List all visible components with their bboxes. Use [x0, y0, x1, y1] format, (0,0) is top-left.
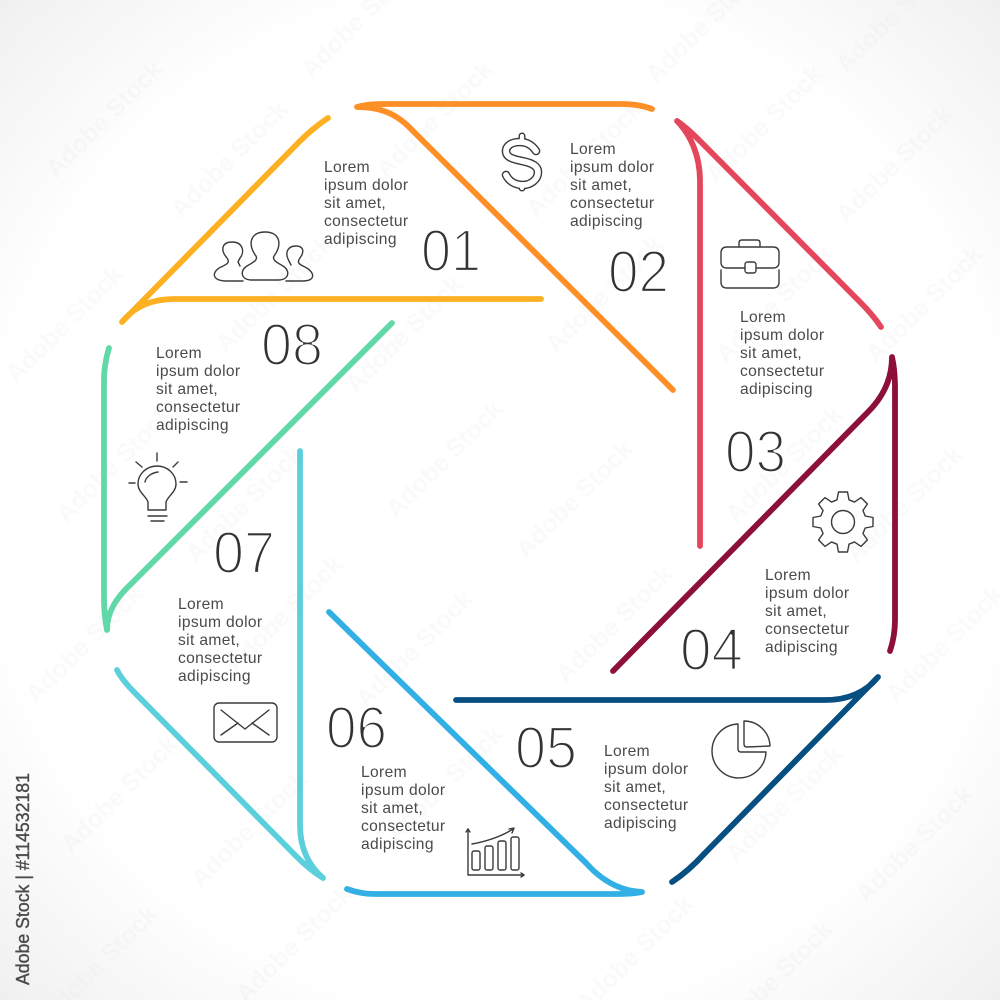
- watermark pattern: Adobe Stock: [40, 55, 168, 183]
- text block 08: consectetur: [156, 399, 240, 416]
- text block 02: Lorem: [570, 141, 616, 158]
- text block 01: sit amet,: [324, 195, 386, 212]
- text block 03: Lorem: [740, 309, 786, 326]
- text block 03: consectetur: [740, 363, 824, 380]
- watermark pattern: Adobe Stock: [860, 240, 988, 368]
- icon: dollar: [506, 136, 538, 188]
- text block 06: Lorem: [361, 764, 407, 781]
- icon: gear: [813, 492, 873, 552]
- text block 02: adipiscing: [570, 213, 643, 230]
- panel 06: [326, 695, 524, 877]
- panel 04: [680, 492, 873, 683]
- watermark pattern: Adobe Stock: [20, 580, 148, 708]
- text block 07: sit amet,: [178, 632, 240, 649]
- text block 06: consectetur: [361, 818, 445, 835]
- watermark pattern: Adobe Stock: [720, 400, 848, 528]
- text block 05: ipsum dolor: [604, 761, 688, 778]
- panel 07: [178, 520, 277, 742]
- icon: people: [214, 232, 313, 281]
- icon: bar chart: [466, 828, 524, 877]
- line segment 07 green: [104, 323, 392, 630]
- text block 05: sit amet,: [604, 779, 666, 796]
- icon: pie chart: [712, 721, 770, 778]
- text block 03: sit amet,: [740, 345, 802, 362]
- text block 05: consectetur: [604, 797, 688, 814]
- text block 07: ipsum dolor: [178, 614, 262, 631]
- line segment 04 navy: [456, 677, 878, 882]
- line segment 05 blue: [329, 612, 642, 894]
- text block 07: consectetur: [178, 650, 262, 667]
- text block 08: ipsum dolor: [156, 363, 240, 380]
- watermark pattern: Adobe Stock: [220, 550, 348, 678]
- number 06: 06: [326, 695, 387, 761]
- text block 08: adipiscing: [156, 417, 229, 434]
- text block 02: consectetur: [570, 195, 654, 212]
- watermark pattern: Adobe Stock: [185, 765, 313, 893]
- text block 04: adipiscing: [765, 639, 838, 656]
- number 04: 04: [680, 617, 743, 683]
- watermark pattern: Adobe Stock: [520, 95, 648, 223]
- text block 07: Lorem: [178, 596, 224, 613]
- number 05: 05: [515, 715, 577, 781]
- icon: envelope: [214, 703, 277, 742]
- text block 08: sit amet,: [156, 381, 218, 398]
- watermark pattern: Adobe Stock: [380, 720, 508, 848]
- icon: briefcase: [721, 240, 779, 288]
- line segment 01 orange: [357, 104, 673, 390]
- number 01: 01: [421, 218, 481, 284]
- watermark pattern: Adobe Stock: [210, 230, 338, 358]
- watermark pattern: Adobe Stock: [540, 230, 668, 358]
- watermark pattern: Adobe Stock: [55, 730, 183, 858]
- watermark pattern: Adobe Stock: [380, 395, 508, 523]
- watermark pattern: Adobe Stock: [350, 585, 478, 713]
- text block 06: sit amet,: [361, 800, 423, 817]
- watermark pattern: Adobe Stock: [550, 560, 678, 688]
- text block 05: Lorem: [604, 743, 650, 760]
- watermark pattern: Adobe Stock: [340, 270, 468, 398]
- text block 03: adipiscing: [740, 381, 813, 398]
- watermark pattern: Adobe Stock: [50, 400, 178, 528]
- text block 04: Lorem: [765, 567, 811, 584]
- panel 08: [129, 312, 323, 521]
- panel 03: [721, 240, 824, 485]
- watermark pattern: Adobe Stock: [180, 440, 308, 568]
- text block 02: sit amet,: [570, 177, 632, 194]
- text block 04: consectetur: [765, 621, 849, 638]
- watermark pattern: Adobe Stock: [700, 60, 828, 188]
- text block 01: consectetur: [324, 213, 408, 230]
- watermark pattern: Adobe Stock: [370, 55, 498, 183]
- text block 07: adipiscing: [178, 668, 251, 685]
- text block 01: Lorem: [324, 159, 370, 176]
- text block 05: adipiscing: [604, 815, 677, 832]
- stock id caption: Adobe Stock | #114532181: [13, 773, 33, 985]
- line segment 03 maroon: [613, 357, 895, 671]
- number 02: 02: [608, 239, 669, 305]
- watermark pattern: Adobe Stock: [830, 100, 958, 228]
- watermark pattern: Adobe Stock: [165, 95, 293, 223]
- watermark pattern: Adobe Stock: [710, 240, 838, 368]
- watermark pattern: Adobe Stock: [720, 740, 848, 868]
- text block 08: Lorem: [156, 345, 202, 362]
- text block 04: ipsum dolor: [765, 585, 849, 602]
- text block 06: ipsum dolor: [361, 782, 445, 799]
- panel 02: [506, 136, 669, 305]
- line segment 08 yellow: [122, 118, 541, 322]
- text block 04: sit amet,: [765, 603, 827, 620]
- text block 03: ipsum dolor: [740, 327, 824, 344]
- text block 01: adipiscing: [324, 231, 397, 248]
- watermark pattern: Adobe Stock: [850, 780, 978, 908]
- watermark pattern: Adobe Stock: [510, 435, 638, 563]
- line segment 02 red: [677, 121, 881, 546]
- watermark pattern: Adobe Stock: [0, 260, 128, 388]
- panel 01: [214, 159, 481, 284]
- text block 06: adipiscing: [361, 836, 434, 853]
- number 08: 08: [261, 312, 323, 378]
- line segment 06 teal: [117, 451, 323, 878]
- number 07: 07: [213, 520, 275, 586]
- panel 05: [515, 715, 770, 832]
- icon: light bulb: [129, 453, 187, 521]
- watermark pattern: Adobe Stock: [840, 440, 968, 568]
- text block 02: ipsum dolor: [570, 159, 654, 176]
- number 03: 03: [725, 419, 786, 485]
- text block 01: ipsum dolor: [324, 177, 408, 194]
